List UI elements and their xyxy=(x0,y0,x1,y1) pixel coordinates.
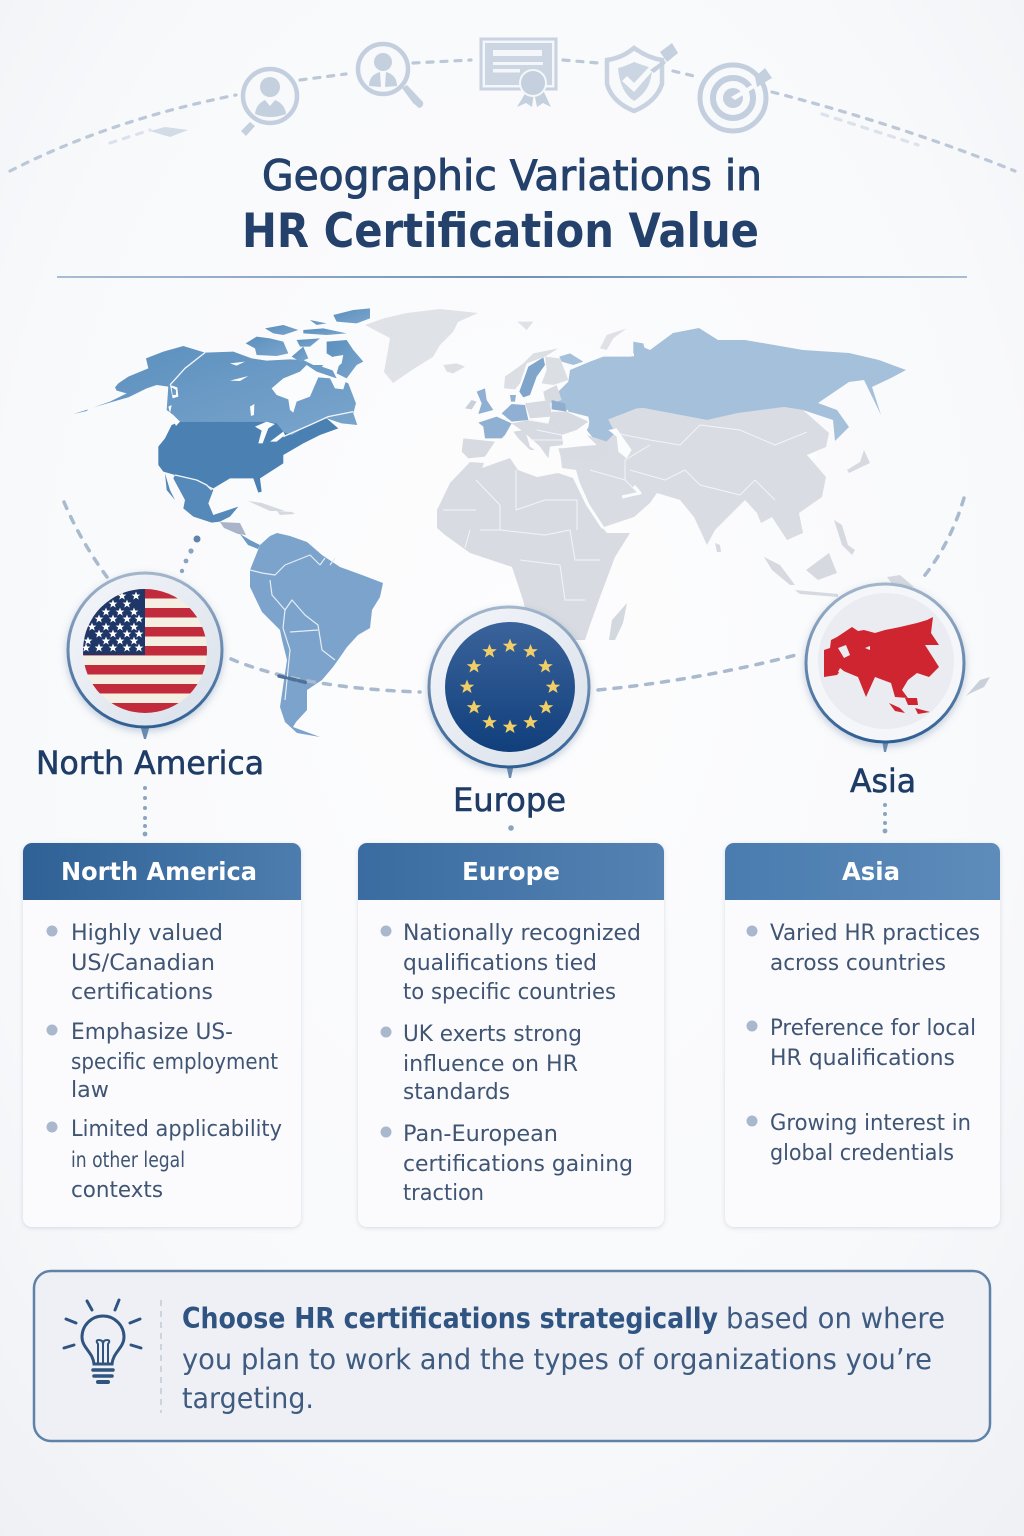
icon: certificate xyxy=(481,39,556,107)
bullet list: HR qualifications xyxy=(770,1045,955,1071)
card header xyxy=(358,843,664,900)
map: greenland xyxy=(365,309,478,383)
badge: north america flag xyxy=(68,573,222,739)
title xyxy=(242,151,762,259)
bullet list: traction xyxy=(403,1180,484,1206)
bullet list: Preference for local xyxy=(770,1015,976,1041)
map: africa xyxy=(437,458,630,640)
card header: Asia xyxy=(842,857,900,886)
bullet list: Growing interest in xyxy=(770,1110,971,1136)
map: great lakes and borders xyxy=(168,353,353,490)
bullet list: in other legal xyxy=(71,1148,185,1172)
bullet list: across countries xyxy=(770,950,946,976)
bullet list: certifications xyxy=(71,979,213,1005)
title: HR Certification Value xyxy=(242,204,759,259)
map: south america xyxy=(250,533,383,737)
bullet list: specific employment xyxy=(71,1049,278,1075)
icon: eu flag xyxy=(445,622,575,752)
map: united states xyxy=(158,418,338,493)
title: Geographic Variations in xyxy=(262,151,762,200)
bullet list: Highly valued xyxy=(71,920,223,946)
bullet list: UK exerts strong xyxy=(403,1021,582,1047)
panel: asia card xyxy=(725,843,1000,1227)
icon: shield with check and arrow xyxy=(607,43,678,111)
dotted stems to cards xyxy=(143,786,887,836)
map: europe xyxy=(443,322,660,462)
icon: light bulb xyxy=(64,1300,141,1382)
icon: target with arrow xyxy=(700,65,772,131)
bullet list: US/Canadian xyxy=(71,950,215,976)
card header xyxy=(23,843,301,900)
bullet list: to specific countries xyxy=(403,979,616,1005)
icon: person in magnifier xyxy=(241,69,297,136)
bullet list: qualifications tied xyxy=(403,950,597,976)
bullet list: Emphasize US- xyxy=(71,1019,233,1045)
bullet list xyxy=(46,920,282,1203)
map: hudson bay and lakes cutouts xyxy=(230,355,347,416)
world map xyxy=(73,308,990,737)
card header xyxy=(725,843,1000,900)
map: north america xyxy=(73,308,370,523)
icon: us flag xyxy=(82,589,207,713)
callout text: Choose HR certifications strategically xyxy=(182,1302,718,1335)
map: mexico xyxy=(165,473,238,523)
bullet list: certifications gaining xyxy=(403,1151,633,1177)
dashed arc connecting the top icons xyxy=(10,60,1015,171)
icon row xyxy=(241,39,772,136)
badge: asia map xyxy=(806,584,964,752)
card header: North America xyxy=(61,857,257,886)
connector dashes between flags xyxy=(64,498,964,692)
label: north america: North America xyxy=(36,744,264,782)
panel: europe card xyxy=(358,843,664,1227)
bullet list: standards xyxy=(403,1079,510,1105)
card header: Europe xyxy=(462,857,560,886)
map: central america and caribbean xyxy=(220,501,295,549)
bullet list: contexts xyxy=(71,1177,163,1203)
map: canada and alaska xyxy=(73,308,370,435)
callout text: targeting. xyxy=(182,1382,314,1415)
callout text xyxy=(182,1302,945,1415)
bullet list: Varied HR practices xyxy=(770,920,980,946)
bullet list xyxy=(380,920,641,1206)
bullet list xyxy=(746,920,980,1166)
bullet list: law xyxy=(71,1077,109,1103)
label: europe: Europe xyxy=(453,781,566,819)
bullet list: Pan-European xyxy=(403,1121,558,1147)
panel: north america card xyxy=(23,843,301,1227)
map: russia xyxy=(558,328,906,441)
bullet list: Nationally recognized xyxy=(403,920,641,946)
bullet list: global credentials xyxy=(770,1140,954,1166)
bullet list: Limited applicability xyxy=(71,1116,282,1142)
badge: europe flag xyxy=(429,607,589,778)
icon: magnifier over person xyxy=(358,44,423,108)
callout xyxy=(34,1271,990,1441)
callout text: you plan to work and the types of organizations you’re xyxy=(182,1343,932,1376)
icon: red asia silhouette xyxy=(824,617,939,714)
bullet list: influence on HR xyxy=(403,1051,578,1077)
map: asia xyxy=(560,407,990,696)
label: asia: Asia xyxy=(850,762,916,800)
callout text: based on where xyxy=(726,1302,945,1335)
